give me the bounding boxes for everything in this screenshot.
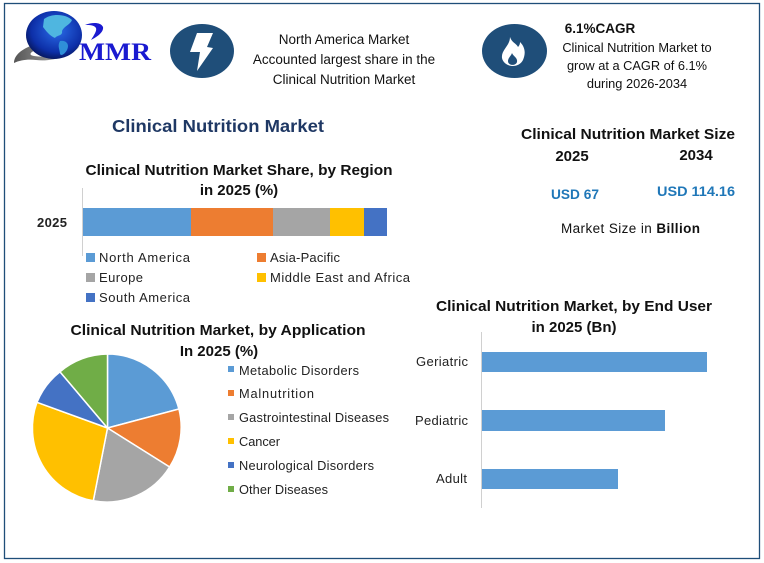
logo: MMR [14, 11, 152, 66]
callout: North America share: Accounted largest share in the [253, 52, 435, 67]
legend: region: North America [99, 250, 191, 265]
market size panel: 2034 [679, 147, 713, 164]
chart title: share by region: Clinical Nutrition Market Share, by Region [86, 162, 392, 179]
chart title: by application [70, 322, 366, 360]
market size panel: 2025 [555, 148, 589, 165]
legend: application: Malnutrition [239, 386, 314, 401]
chart title: by end user [436, 298, 712, 336]
icon: lightning bolt [170, 24, 234, 78]
callout: North America share: North America Market [279, 32, 410, 47]
main title: Clinical Nutrition Market [112, 116, 324, 136]
chart title: by application: In 2025 (%) [180, 343, 258, 360]
legend: region: Asia-Pacific [270, 250, 340, 265]
callout: CAGR: during 2026-2034 [587, 76, 687, 91]
stacked bar chart: region: 2025 [37, 215, 67, 230]
legend: region [86, 250, 411, 305]
callout: CAGR [562, 21, 712, 91]
legend: application [228, 363, 389, 497]
chart title: share by region [86, 162, 392, 199]
bar chart: end user: Adult [436, 471, 467, 486]
market size panel: USD 67 [551, 186, 599, 202]
chart title: share by region: in 2025 (%) [200, 182, 278, 199]
legend: region: South America [99, 290, 191, 305]
market size panel [521, 126, 735, 236]
callout: CAGR: grow at a CAGR of 6.1% [567, 58, 707, 73]
chart title: by end user: in 2025 (Bn) [531, 319, 617, 336]
legend: application: Metabolic Disorders [239, 363, 359, 378]
legend: application: Gastrointestinal Diseases [239, 410, 389, 425]
market size panel: Clinical Nutrition Market Size [521, 126, 735, 143]
legend: region: Europe [99, 270, 143, 285]
callout: CAGR: Clinical Nutrition Market to [562, 40, 712, 55]
chart title: by application: Clinical Nutrition Market, by Application [70, 322, 366, 339]
callout: North America share [253, 32, 435, 87]
market size panel: USD 114.16 [657, 183, 735, 199]
callout: CAGR: 6.1%CAGR [565, 21, 636, 36]
icon: flame [482, 24, 547, 78]
legend: application: Cancer [239, 434, 281, 449]
market size panel: Market Size in Billion [561, 221, 700, 236]
bar chart: end user [415, 332, 707, 508]
bar chart: end user: Geriatric [416, 354, 468, 369]
chart title: by end user: Clinical Nutrition Market, by End User [436, 298, 712, 315]
callout: North America share: Clinical Nutrition Market [273, 72, 416, 87]
legend: application: Neurological Disorders [239, 458, 374, 473]
stacked bar chart: region [37, 188, 387, 256]
legend: region: Middle East and Africa [270, 270, 411, 285]
legend: application: Other Diseases [239, 482, 328, 497]
pie chart: application [32, 354, 181, 502]
logo: MMR: MMR [79, 39, 152, 66]
bar chart: end user: Pediatric [415, 413, 468, 428]
